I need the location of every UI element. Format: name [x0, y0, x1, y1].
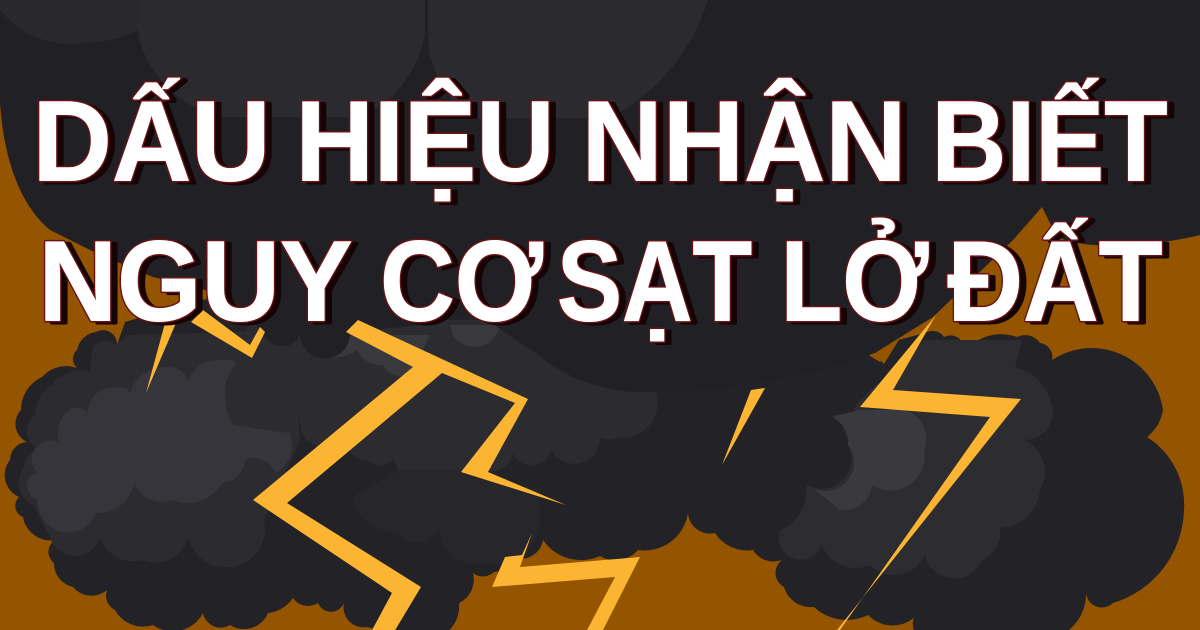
title outline: NGUY: [38, 218, 352, 346]
title shadow: DẤU: [38, 80, 276, 208]
title outline: ĐẤT: [948, 218, 1162, 346]
bolt: upper left chevron: [191, 310, 265, 358]
cloud: top mass: [0, 0, 1200, 392]
title text: LỞ: [780, 218, 929, 346]
title outline: NHẬN: [582, 78, 906, 206]
title text: DẤU: [32, 78, 270, 206]
bolt: small left spike: [146, 323, 176, 393]
title text: [32, 78, 1168, 346]
title text: NGUY: [38, 218, 352, 346]
title shadow: ĐẤT: [954, 220, 1168, 348]
title shadow: NHẬN: [588, 80, 912, 208]
title text: HIỆU: [296, 78, 554, 206]
cloud: lower left and centre: [5, 295, 820, 630]
title shadow: [38, 80, 1174, 348]
title shadow: BIẾT: [938, 80, 1174, 208]
bolt: small centre sliver: [722, 388, 765, 465]
title shadow: CƠ: [386, 220, 550, 348]
shade: left light tone: [27, 360, 292, 533]
title text: BIẾT: [932, 78, 1168, 206]
title: two line heading: [32, 78, 1174, 348]
title text: SẠT: [557, 218, 752, 346]
shade: upper centre lobes: [138, 0, 708, 118]
lightning bolts: [146, 310, 1021, 630]
shade: centre lower mid tone: [352, 470, 540, 564]
title shadow: LỞ: [786, 220, 935, 348]
title text: CƠ: [380, 218, 544, 346]
lower storm clouds: [5, 295, 1184, 630]
bolt: large centre: [253, 320, 566, 630]
title outline: HIỆU: [296, 78, 554, 206]
shade: centre mid tone: [225, 320, 658, 482]
shade: upper left lobe: [0, 0, 150, 44]
title outline: SẠT: [557, 218, 752, 346]
cloud: dark puff over right shade: [665, 360, 851, 540]
bolt: large right: [837, 315, 1021, 630]
title shadow: NGUY: [44, 220, 358, 348]
bolt: bottom centre: [492, 533, 640, 630]
shade: right mid tone: [779, 340, 1053, 579]
title outline: [32, 78, 1168, 346]
large top storm cloud: [0, 0, 1200, 392]
title outline: DẤU: [32, 78, 270, 206]
shade: left mid tone: [19, 330, 300, 567]
title outline: LỞ: [780, 218, 929, 346]
title shadow: SẠT: [563, 220, 758, 348]
shade: right light tone: [803, 410, 926, 510]
brown notch beside right bolt: [874, 338, 900, 364]
cloud: lower right: [776, 331, 1184, 630]
title shadow: HIỆU: [302, 80, 560, 208]
title outline: CƠ: [380, 218, 544, 346]
title outline: BIẾT: [932, 78, 1168, 206]
shade: centre top light patch: [296, 325, 500, 376]
title text: ĐẤT: [948, 218, 1162, 346]
title text: NHẬN: [582, 78, 906, 206]
